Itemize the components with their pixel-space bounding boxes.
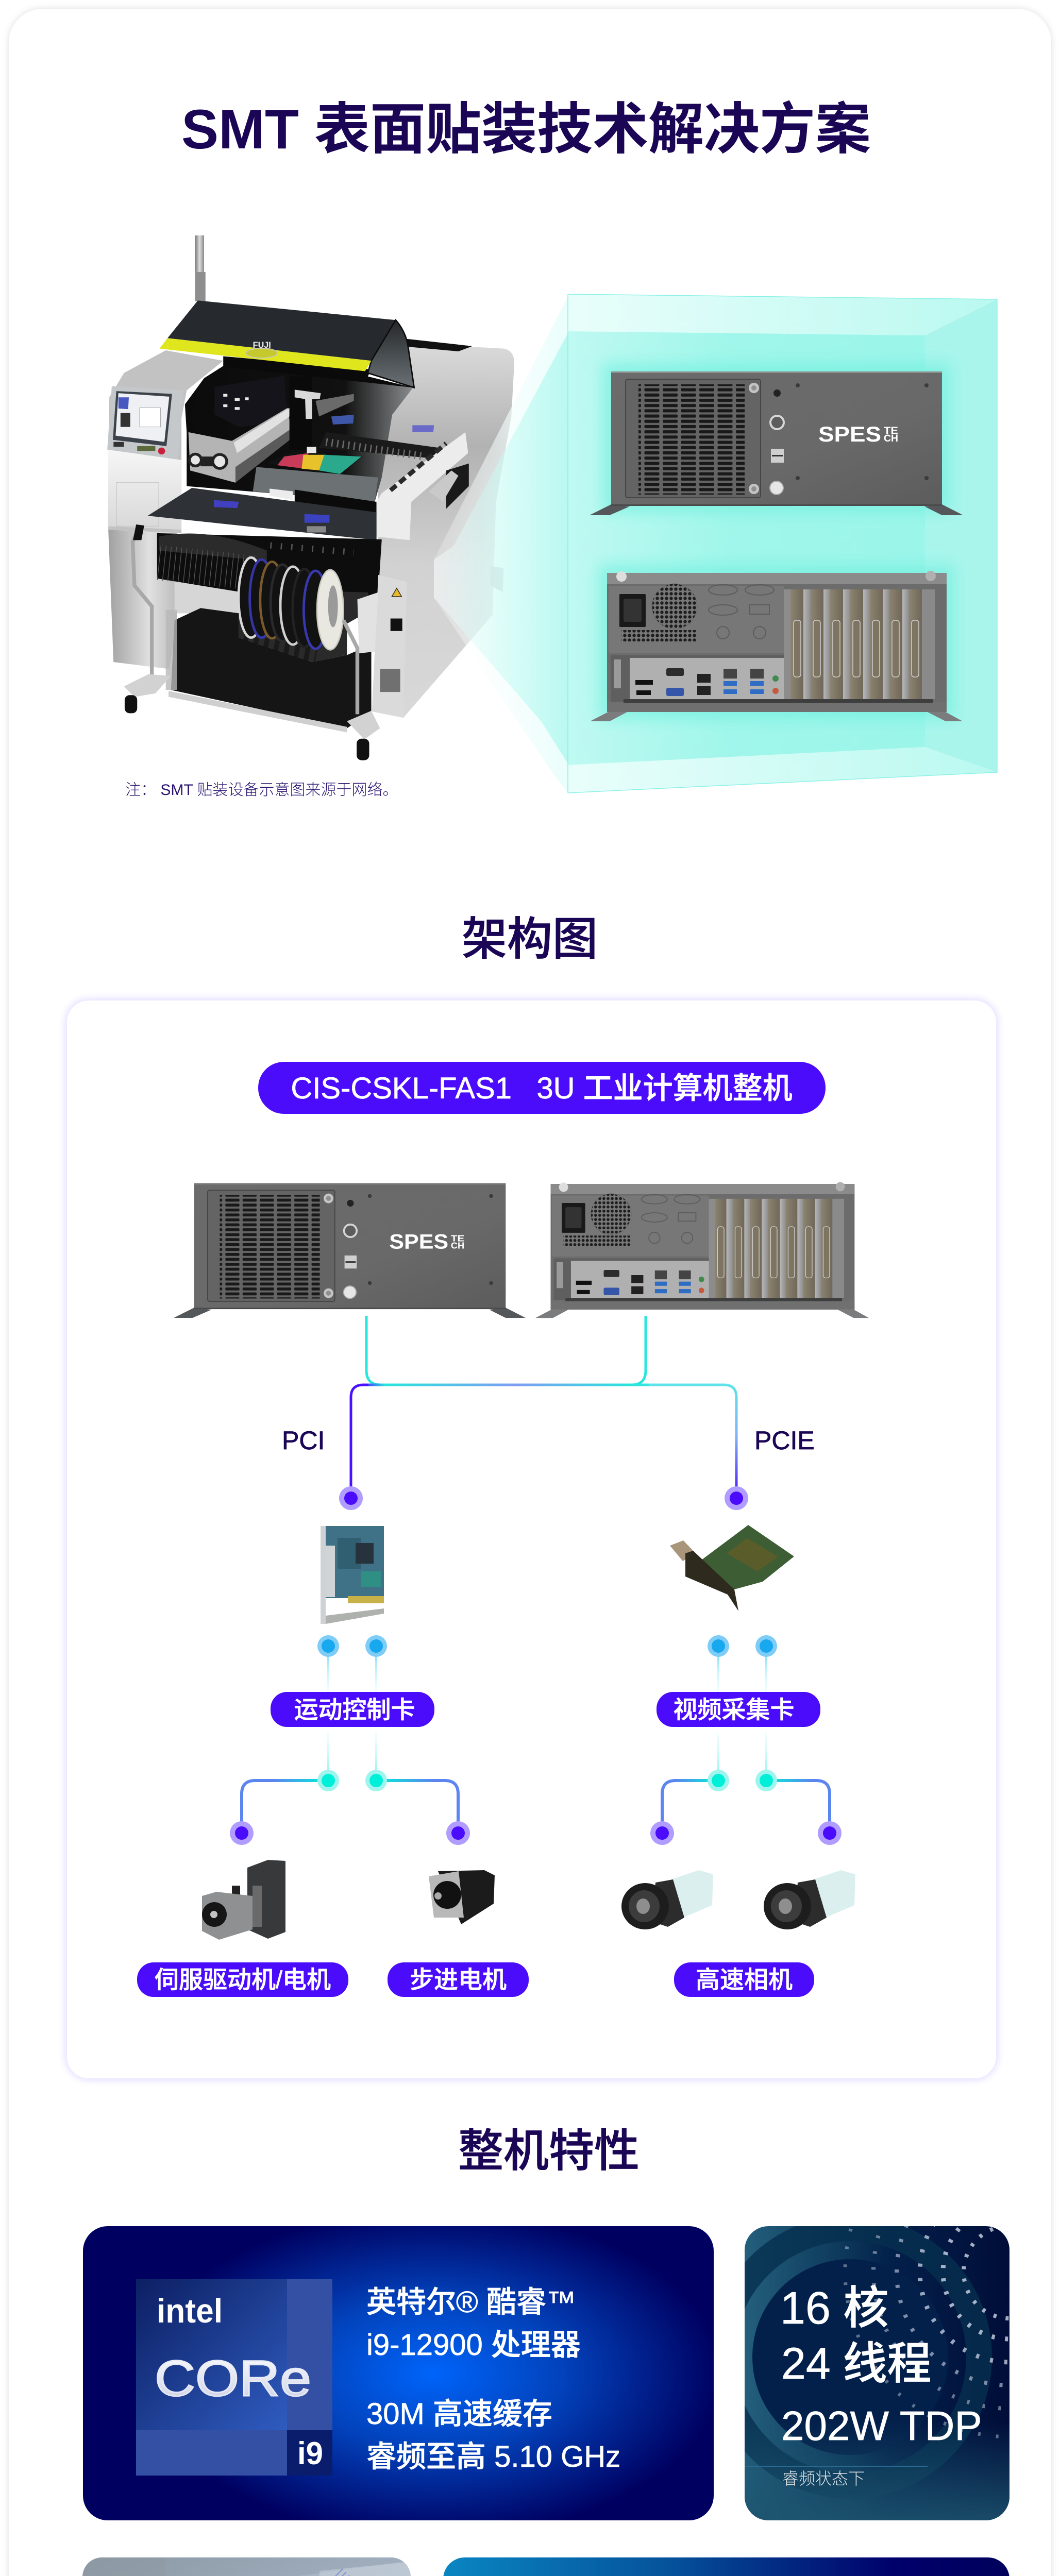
tape feeders and reels <box>157 533 382 662</box>
icon: intel core i9 badge <box>136 2279 332 2476</box>
pill: product model: CIS-CSKL-FAS1 3U 工业计算机整机 <box>291 1072 793 1105</box>
icon: intel core i9 badge: i9 <box>297 2436 323 2471</box>
pill: stepper motor <box>388 1962 529 1997</box>
connectors: motion control card <box>242 1646 458 1833</box>
illustration: SMT placement machine <box>107 235 514 760</box>
pill: servo motor <box>137 1962 348 1997</box>
image: high speed camera 1 <box>621 1870 713 1929</box>
pill: motion control card: 运动控制卡 <box>294 1696 415 1723</box>
touch screen panel <box>107 386 184 460</box>
feeder tray arm <box>377 432 469 540</box>
hood and yellow band <box>160 300 414 387</box>
image: servo drive and motor <box>202 1860 285 1940</box>
icon: signal beacon <box>195 235 206 301</box>
pill: high speed camera: 高速相机 <box>696 1966 793 1993</box>
diagram: rear view computer <box>535 1182 869 1318</box>
nodes: blue inputs <box>317 1635 777 1657</box>
projection: cyan perspective box <box>434 294 997 793</box>
industrial computer: front view <box>590 371 963 515</box>
note: 注： SMT 贴装设备示意图来源于网络。 <box>125 782 398 799</box>
processor specs: i9-12900 处理器 <box>366 2328 581 2362</box>
industrial computer: front view: TE <box>884 426 898 436</box>
stats text: 202W TDP <box>781 2403 982 2449</box>
stats text <box>780 2282 982 2488</box>
title: SMT 表面贴装技术解决方案 <box>181 98 871 160</box>
pill: servo motor: 伺服驱动机/电机 <box>155 1966 331 1993</box>
pill: product model <box>258 1062 826 1114</box>
stats text: 16 核 <box>780 2282 888 2333</box>
diagram: front view computer: CH <box>451 1241 464 1251</box>
placement head and gantry <box>189 376 354 483</box>
stats text: 睿频状态下 <box>782 2469 865 2488</box>
processor specs <box>366 2285 620 2473</box>
connector lines: computer to buses <box>351 1316 736 1498</box>
processor specs: 30M 高速缓存 <box>366 2397 552 2431</box>
image: video capture card <box>670 1525 794 1611</box>
image: stepper motor <box>429 1870 495 1924</box>
panel: architecture card <box>67 1001 996 2078</box>
processor specs: 睿频至高 5.10 GHz <box>366 2440 620 2473</box>
image: high speed camera 2 <box>764 1870 855 1929</box>
nodes: purple device endpoints <box>230 1821 842 1845</box>
industrial computer: front view: SPES <box>818 422 881 446</box>
printed circuit board <box>267 447 363 474</box>
icon: intel core i9 badge: intel <box>157 2292 223 2330</box>
lower cabinet <box>169 608 372 733</box>
hood and yellow band: FUJI <box>253 341 271 350</box>
panel: compact structure <box>82 2557 412 2576</box>
node: PCI endpoint <box>339 1486 363 1510</box>
panel: cores, threads, TDP <box>745 2226 1009 2520</box>
nodes: cyan outputs <box>317 1770 777 1791</box>
heading: architecture: 架构图 <box>462 913 598 964</box>
diagram: front view computer <box>174 1183 526 1318</box>
diagram: front view computer: TE <box>451 1233 464 1244</box>
pill: high speed camera <box>674 1962 814 1997</box>
industrial computer: front view: CH <box>884 433 898 444</box>
pill: motion control card <box>271 1692 434 1727</box>
icon: intel core i9 badge: CORe <box>155 2350 311 2406</box>
diagram: front view computer: SPES <box>389 1231 448 1253</box>
glow behind units <box>603 363 951 513</box>
label: PCIE: PCIE <box>754 1426 815 1455</box>
panel: memory and storage <box>443 2557 1009 2576</box>
handles and casters <box>124 524 503 760</box>
processor specs: 英特尔® 酷睿™ <box>366 2285 576 2319</box>
pill: video capture card: 视频采集卡 <box>673 1696 795 1723</box>
stats text: 24 线程 <box>781 2339 932 2388</box>
heading: features: 整机特性 <box>458 2125 640 2176</box>
label: PCI: PCI <box>282 1426 325 1455</box>
node: PCIE endpoint <box>725 1486 748 1510</box>
connectors: video capture card <box>662 1646 830 1833</box>
industrial computer: rear view <box>590 571 963 721</box>
pill: stepper motor: 步进电机 <box>410 1966 507 1993</box>
image: motion control card <box>321 1526 384 1624</box>
glass tray <box>148 488 377 540</box>
pill: video capture card <box>657 1692 820 1727</box>
panel: processor <box>83 2226 714 2520</box>
right front panel <box>357 575 407 718</box>
